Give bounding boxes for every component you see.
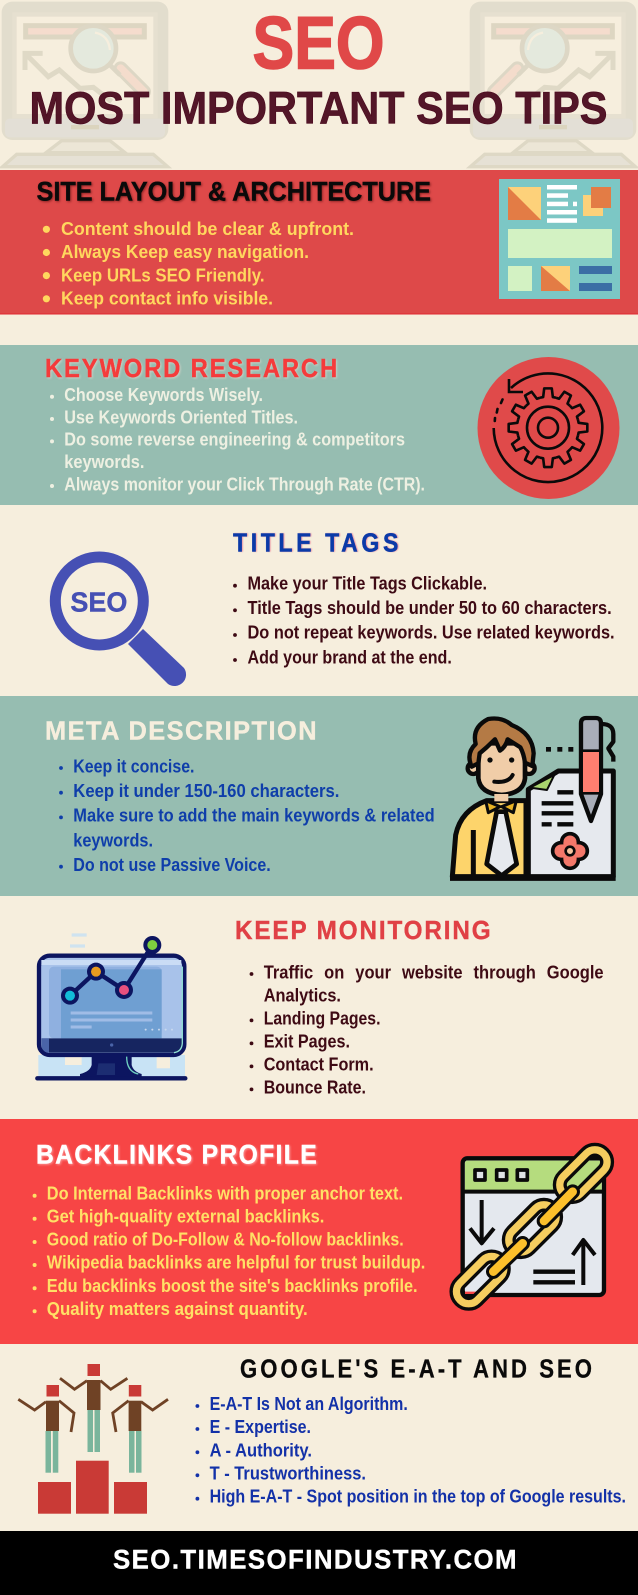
panel: keep monitoring: [37, 915, 604, 1098]
panel: header: [2, 2, 636, 167]
icon: SEO magnifying glass: [55, 557, 186, 686]
list: E-A-T points: A - Authority.: [210, 1439, 312, 1460]
list: backlink tips: Get high-quality external backlinks.: [47, 1205, 324, 1226]
list: E-A-T points: T - Trustworthiness.: [210, 1462, 366, 1483]
list: keyword tips: Do some reverse engineering & competitors: [64, 429, 405, 450]
panel: keyword research: [0, 345, 638, 505]
list: monitoring items: Landing Pages.: [264, 1009, 380, 1029]
list: monitoring items: Traffic on your website through Google: [264, 962, 604, 982]
list: E-A-T points: E-A-T Is Not an Algorithm.: [210, 1393, 408, 1414]
icon: faded monitor left: [2, 2, 168, 167]
heading: keep monitoring: KEEP MONITORING: [235, 915, 492, 945]
list: meta description tips: Make sure to add the main keywords & related: [73, 806, 435, 826]
list: monitoring items: Exit Pages.: [264, 1032, 350, 1052]
list: site layout tips: Content should be clear & upfront.: [61, 219, 354, 239]
title: SEO: SEO: [252, 2, 384, 84]
panel: title tags: [55, 530, 615, 686]
list: keyword tips: keywords.: [64, 451, 144, 472]
icon: monitor with line chart: [37, 935, 185, 1078]
list: backlink tips: Do Internal Backlinks with proper anchor text.: [47, 1182, 403, 1203]
footer url: SEO.TIMESOFINDUSTRY.COM: [113, 1544, 518, 1574]
list: E-A-T points: [196, 1393, 626, 1507]
list: meta description tips: Do not use Passive Voice.: [73, 855, 271, 875]
list: backlink tips: [33, 1182, 425, 1319]
list: title tag tips: Make your Title Tags Clickable.: [248, 573, 487, 593]
panel: site layout and architecture: [0, 170, 638, 314]
icon: SEO magnifying glass: SEO: [70, 586, 127, 618]
list: title tag tips: [233, 573, 615, 668]
icon: gear with circular arrow: [478, 357, 620, 499]
list: monitoring items: Analytics.: [264, 985, 341, 1005]
list: keyword tips: Always monitor your Click Through Rate (CTR).: [64, 473, 425, 494]
heading: title tags: TITLE TAGS: [233, 530, 402, 558]
list: site layout tips: Keep contact info visible.: [61, 288, 273, 308]
list: keyword tips: Choose Keywords Wisely.: [64, 384, 263, 405]
list: backlink tips: Wikipedia backlinks are helpful for trust buildup.: [47, 1252, 425, 1273]
list: meta description tips: Keep it under 150-160 characters.: [73, 781, 339, 801]
list: meta description tips: keywords.: [73, 830, 153, 850]
list: monitoring items: Bounce Rate.: [264, 1078, 366, 1098]
list: backlink tips: Edu backlinks boost the site's backlinks profile.: [47, 1275, 418, 1296]
list: meta description tips: Keep it concise.: [73, 756, 194, 776]
list: site layout tips: [43, 219, 354, 308]
panel: backlinks profile: [0, 1119, 638, 1344]
panel: meta description: [0, 696, 638, 896]
list: title tag tips: Title Tags should be under 50 to 60 characters.: [248, 598, 612, 618]
list: title tag tips: Add your brand at the end.: [248, 648, 452, 668]
heading: E-A-T: GOOGLE'S E-A-T AND SEO: [240, 1356, 595, 1384]
list: meta description tips: [59, 756, 435, 875]
list: keyword tips: [50, 384, 425, 494]
list: backlink tips: Quality matters against quantity.: [47, 1298, 308, 1319]
list: site layout tips: Keep URLs SEO Friendly.: [61, 266, 264, 286]
heading: meta description: META DESCRIPTION: [45, 716, 318, 746]
icon: faded monitor right: [470, 2, 636, 167]
heading: backlinks profile: BACKLINKS PROFILE: [36, 1140, 318, 1170]
list: backlink tips: Good ratio of Do-Follow & No-follow backlinks.: [47, 1229, 404, 1250]
panel: footer: [0, 1531, 638, 1595]
heading: site layout: SITE LAYOUT & ARCHITECTURE: [36, 176, 431, 206]
list: keyword tips: Use Keywords Oriented Titles.: [64, 406, 298, 427]
panel: google E-A-T and SEO: [18, 1356, 626, 1514]
icon: page layout wireframe: [499, 179, 620, 299]
icon: three figures on podium: [18, 1364, 168, 1514]
list: monitoring items: Contact Form.: [264, 1055, 374, 1075]
title: most important SEO tips: MOST IMPORTANT SEO TIPS: [30, 82, 608, 134]
heading: keyword research: KEYWORD RESEARCH: [45, 353, 339, 383]
list: monitoring items: [250, 962, 604, 1098]
icon: person with document and pen: [450, 718, 616, 878]
list: E-A-T points: E - Expertise.: [210, 1416, 311, 1437]
list: site layout tips: Always Keep easy navigation.: [61, 242, 309, 262]
icon: browser window with chain links: [451, 1145, 612, 1309]
